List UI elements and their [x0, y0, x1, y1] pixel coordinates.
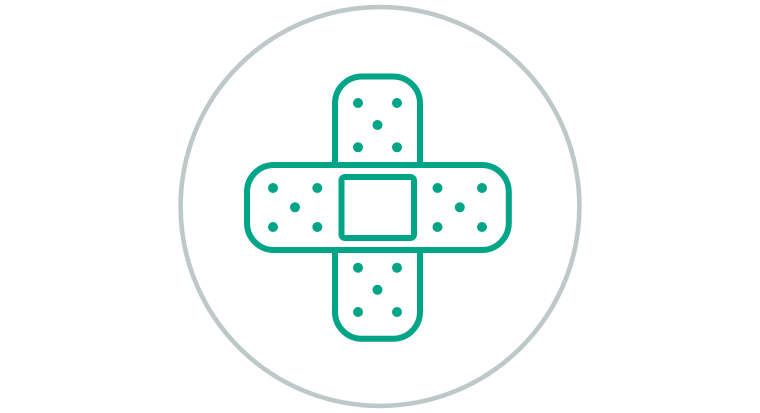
vertical bandage top strip — [335, 76, 420, 165]
horizontal bandage strip — [247, 165, 509, 250]
circle outline — [181, 7, 579, 406]
dots: top strip — [353, 98, 402, 152]
dots: left strip — [268, 183, 322, 232]
vertical bandage bottom strip — [335, 250, 420, 339]
dots: right strip — [432, 183, 487, 232]
icon: crossed bandages — [247, 76, 509, 339]
center gauze pad — [342, 177, 414, 238]
dots: bottom strip — [353, 263, 402, 317]
